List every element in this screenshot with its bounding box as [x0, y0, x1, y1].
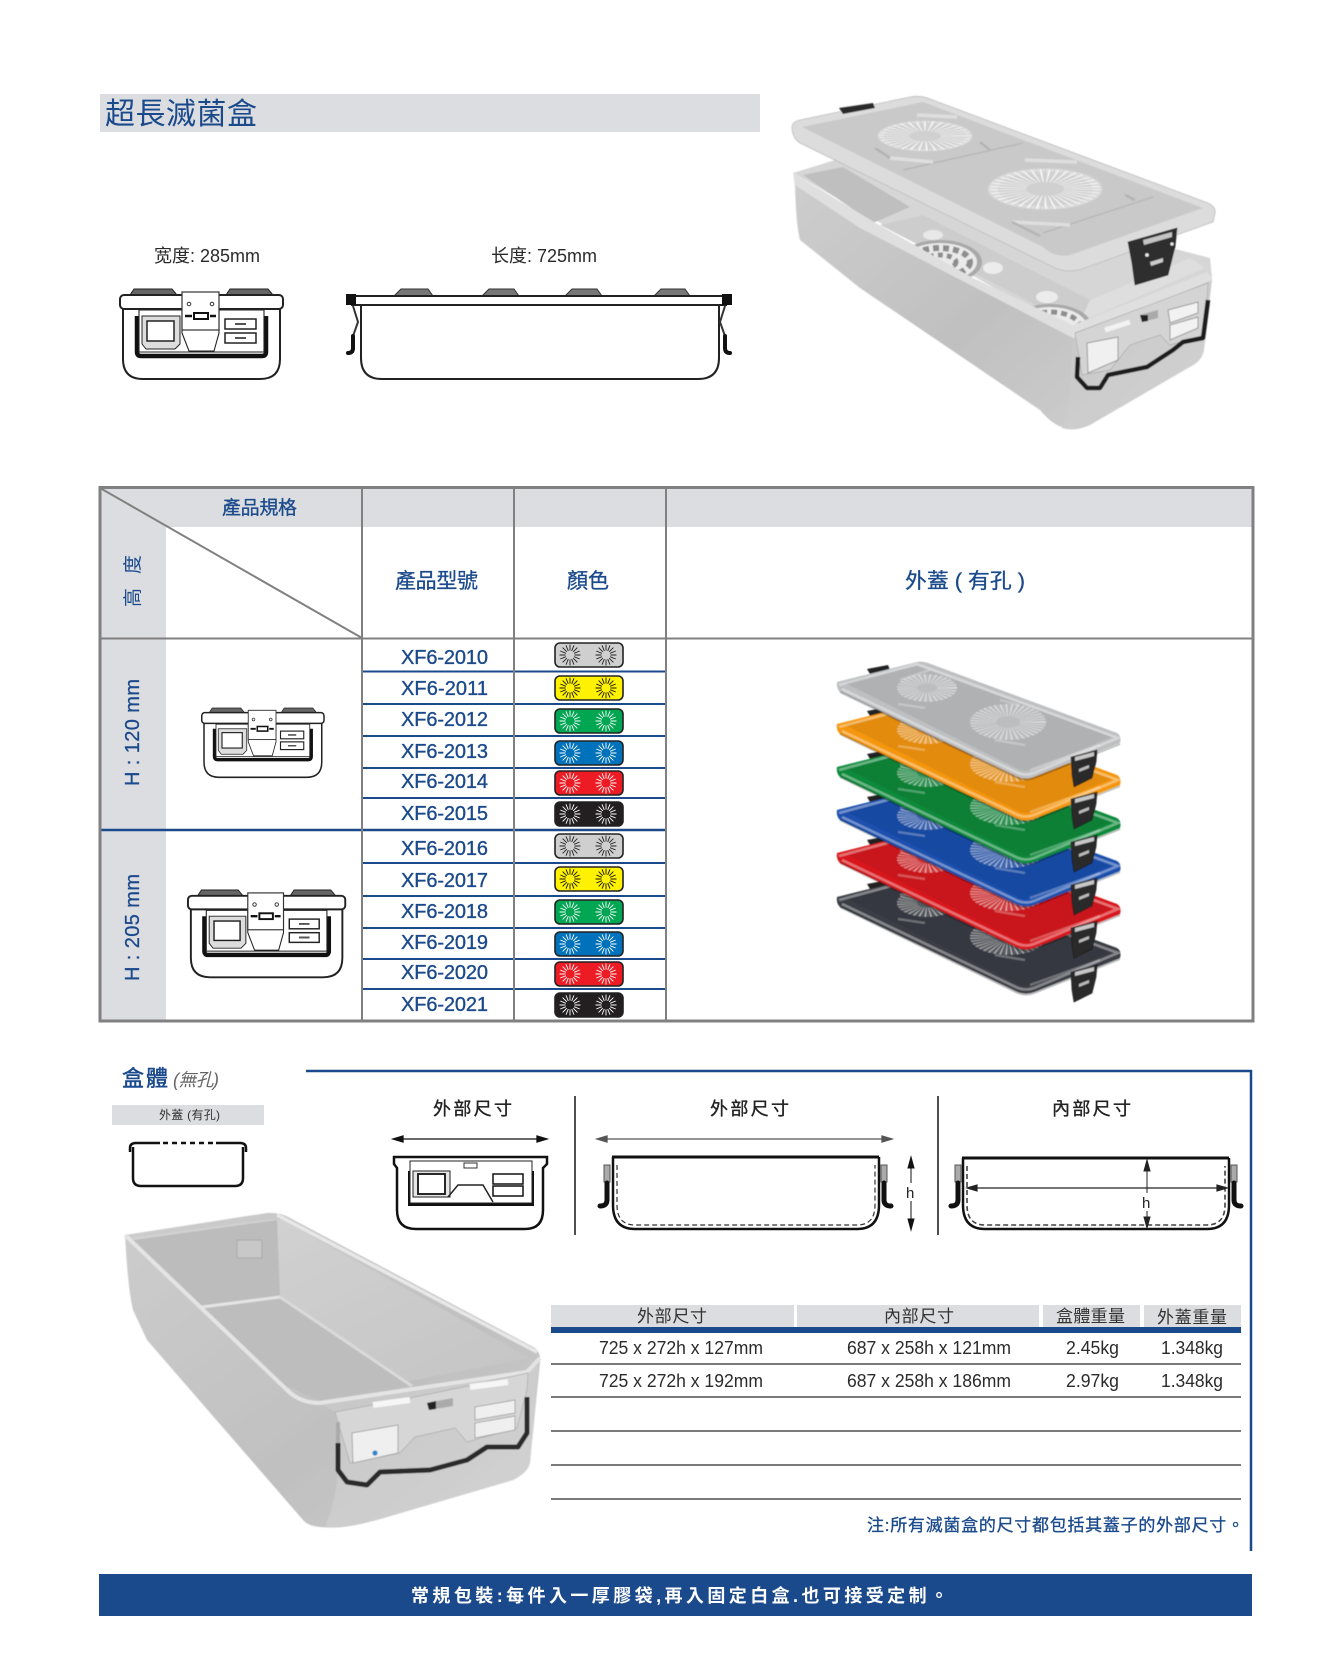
lid [792, 96, 1215, 271]
table border [100, 488, 1253, 1021]
dimension arrow 1 [393, 1136, 547, 1142]
model numbers: XF6-2010 [401, 647, 488, 669]
dimensions table: 盒體重量 [1056, 1307, 1125, 1326]
lid cross-section icon [130, 1143, 246, 1186]
width label: 宽度: 285mm [154, 246, 260, 266]
length label: 长度: 725mm [491, 246, 597, 266]
model numbers: XF6-2012 [401, 709, 488, 731]
model numbers: XF6-2014 [401, 771, 488, 793]
box interior [793, 160, 1212, 333]
box rim [793, 173, 1212, 340]
column heading: lid: 外蓋 ( 有孔 ) [905, 570, 1025, 593]
model numbers: XF6-2013 [401, 741, 488, 763]
model numbers: XF6-2011 [401, 678, 488, 700]
colour swatches [555, 643, 623, 1017]
stacked coloured lids [837, 662, 1121, 1002]
inner dimension arrows with h [967, 1160, 1227, 1228]
lid label tag [112, 1105, 264, 1125]
column heading: color: 顏色 [567, 570, 609, 593]
front view drawing [120, 289, 283, 379]
dimension heading 3: 內部尺寸 [1052, 1099, 1131, 1119]
handle [336, 1422, 340, 1443]
outer shell [125, 1213, 540, 1528]
diagonal [100, 488, 362, 638]
table rows: 725 x 272h x 127mm [599, 1338, 763, 1358]
dimension heading 2: 外部尺寸 [710, 1099, 789, 1119]
dimensions table: 2.97kg [1066, 1371, 1119, 1391]
dimensions table: 內部尺寸 [884, 1307, 954, 1326]
dimensions table: 1.348kg [1161, 1338, 1223, 1358]
section frame [306, 1071, 1251, 1551]
drawing: H 120 box [202, 708, 324, 777]
left height column [99, 487, 166, 1022]
divider 1 [574, 1096, 576, 1235]
model numbers [401, 647, 488, 1016]
side outline drawing [600, 1157, 891, 1229]
model numbers: XF6-2019 [401, 932, 488, 954]
model numbers: XF6-2017 [401, 870, 488, 892]
column heading: model: 產品型號 [395, 570, 478, 593]
lid perforations [877, 121, 1103, 210]
dimensions table: 725 x 272h x 192mm [599, 1371, 763, 1391]
dimensions table: 外部尺寸 [637, 1307, 707, 1326]
title: 超長滅菌盒 [105, 98, 257, 131]
spec table [99, 487, 1254, 1022]
table header band [99, 487, 1254, 527]
row label: H 120: H : 120 mm [122, 679, 144, 786]
row label: height: 高度 [122, 555, 144, 607]
divider 2 [937, 1096, 939, 1235]
row lines [362, 672, 666, 989]
dimension arrow 2 [597, 1136, 892, 1142]
dimension heading 1: 外部尺寸 [433, 1099, 512, 1119]
dimensions table: 687 x 258h x 121mm [847, 1338, 1011, 1358]
height arrow with h [904, 1157, 918, 1230]
section heading: box body [122, 1066, 219, 1091]
model numbers: XF6-2018 [401, 901, 488, 923]
height arrow with h: h [906, 1185, 914, 1202]
rim highlight [125, 1235, 540, 1403]
box long side [795, 185, 1073, 428]
handle [1077, 300, 1208, 388]
title [100, 94, 760, 132]
section heading: box body: (無孔) [173, 1070, 219, 1090]
packaging banner: 常規包裝:每件入一厚膠袋,再入固定白盒.也可接受定制。 [411, 1585, 948, 1606]
end plate [335, 1373, 528, 1463]
dimensions table: 687 x 258h x 186mm [847, 1371, 1011, 1391]
model numbers: XF6-2021 [401, 994, 488, 1016]
dimensions table [551, 1305, 1241, 1499]
row label: H 205: H : 205 mm [122, 874, 144, 981]
front outline drawing [394, 1157, 547, 1229]
product photo: box with open lid [792, 96, 1215, 429]
drawing: H 205 box [188, 890, 345, 977]
interior walls [132, 1219, 530, 1398]
model numbers: XF6-2015 [401, 803, 488, 825]
box end face [1062, 280, 1212, 429]
end plate and labels [1075, 283, 1208, 375]
column heading: product spec: 產品規格 [222, 497, 297, 519]
section heading: box body: 盒體 [122, 1066, 168, 1091]
packaging banner [99, 1574, 1252, 1616]
side view drawing [346, 289, 732, 379]
end face [320, 1358, 539, 1528]
dimensions table: 2.45kg [1066, 1338, 1119, 1358]
lid label tag: 外蓋 (有孔) [159, 1108, 220, 1122]
interior floor [202, 1297, 412, 1400]
model numbers: XF6-2016 [401, 838, 488, 860]
footnote: 注:所有滅菌盒的尺寸都包括其蓋子的外部尺寸。 [867, 1516, 1244, 1535]
lid latches [1128, 228, 1177, 285]
inner dimension arrows with h: h [1142, 1195, 1150, 1212]
dimensions table: 外蓋重量 [1157, 1308, 1227, 1327]
model numbers: XF6-2020 [401, 962, 488, 984]
product photo: open box body [125, 1213, 540, 1528]
dimensions table: 1.348kg [1161, 1371, 1223, 1391]
inner outline drawing [951, 1158, 1241, 1229]
grate circles [898, 230, 1092, 350]
table header cells [551, 1305, 794, 1327]
